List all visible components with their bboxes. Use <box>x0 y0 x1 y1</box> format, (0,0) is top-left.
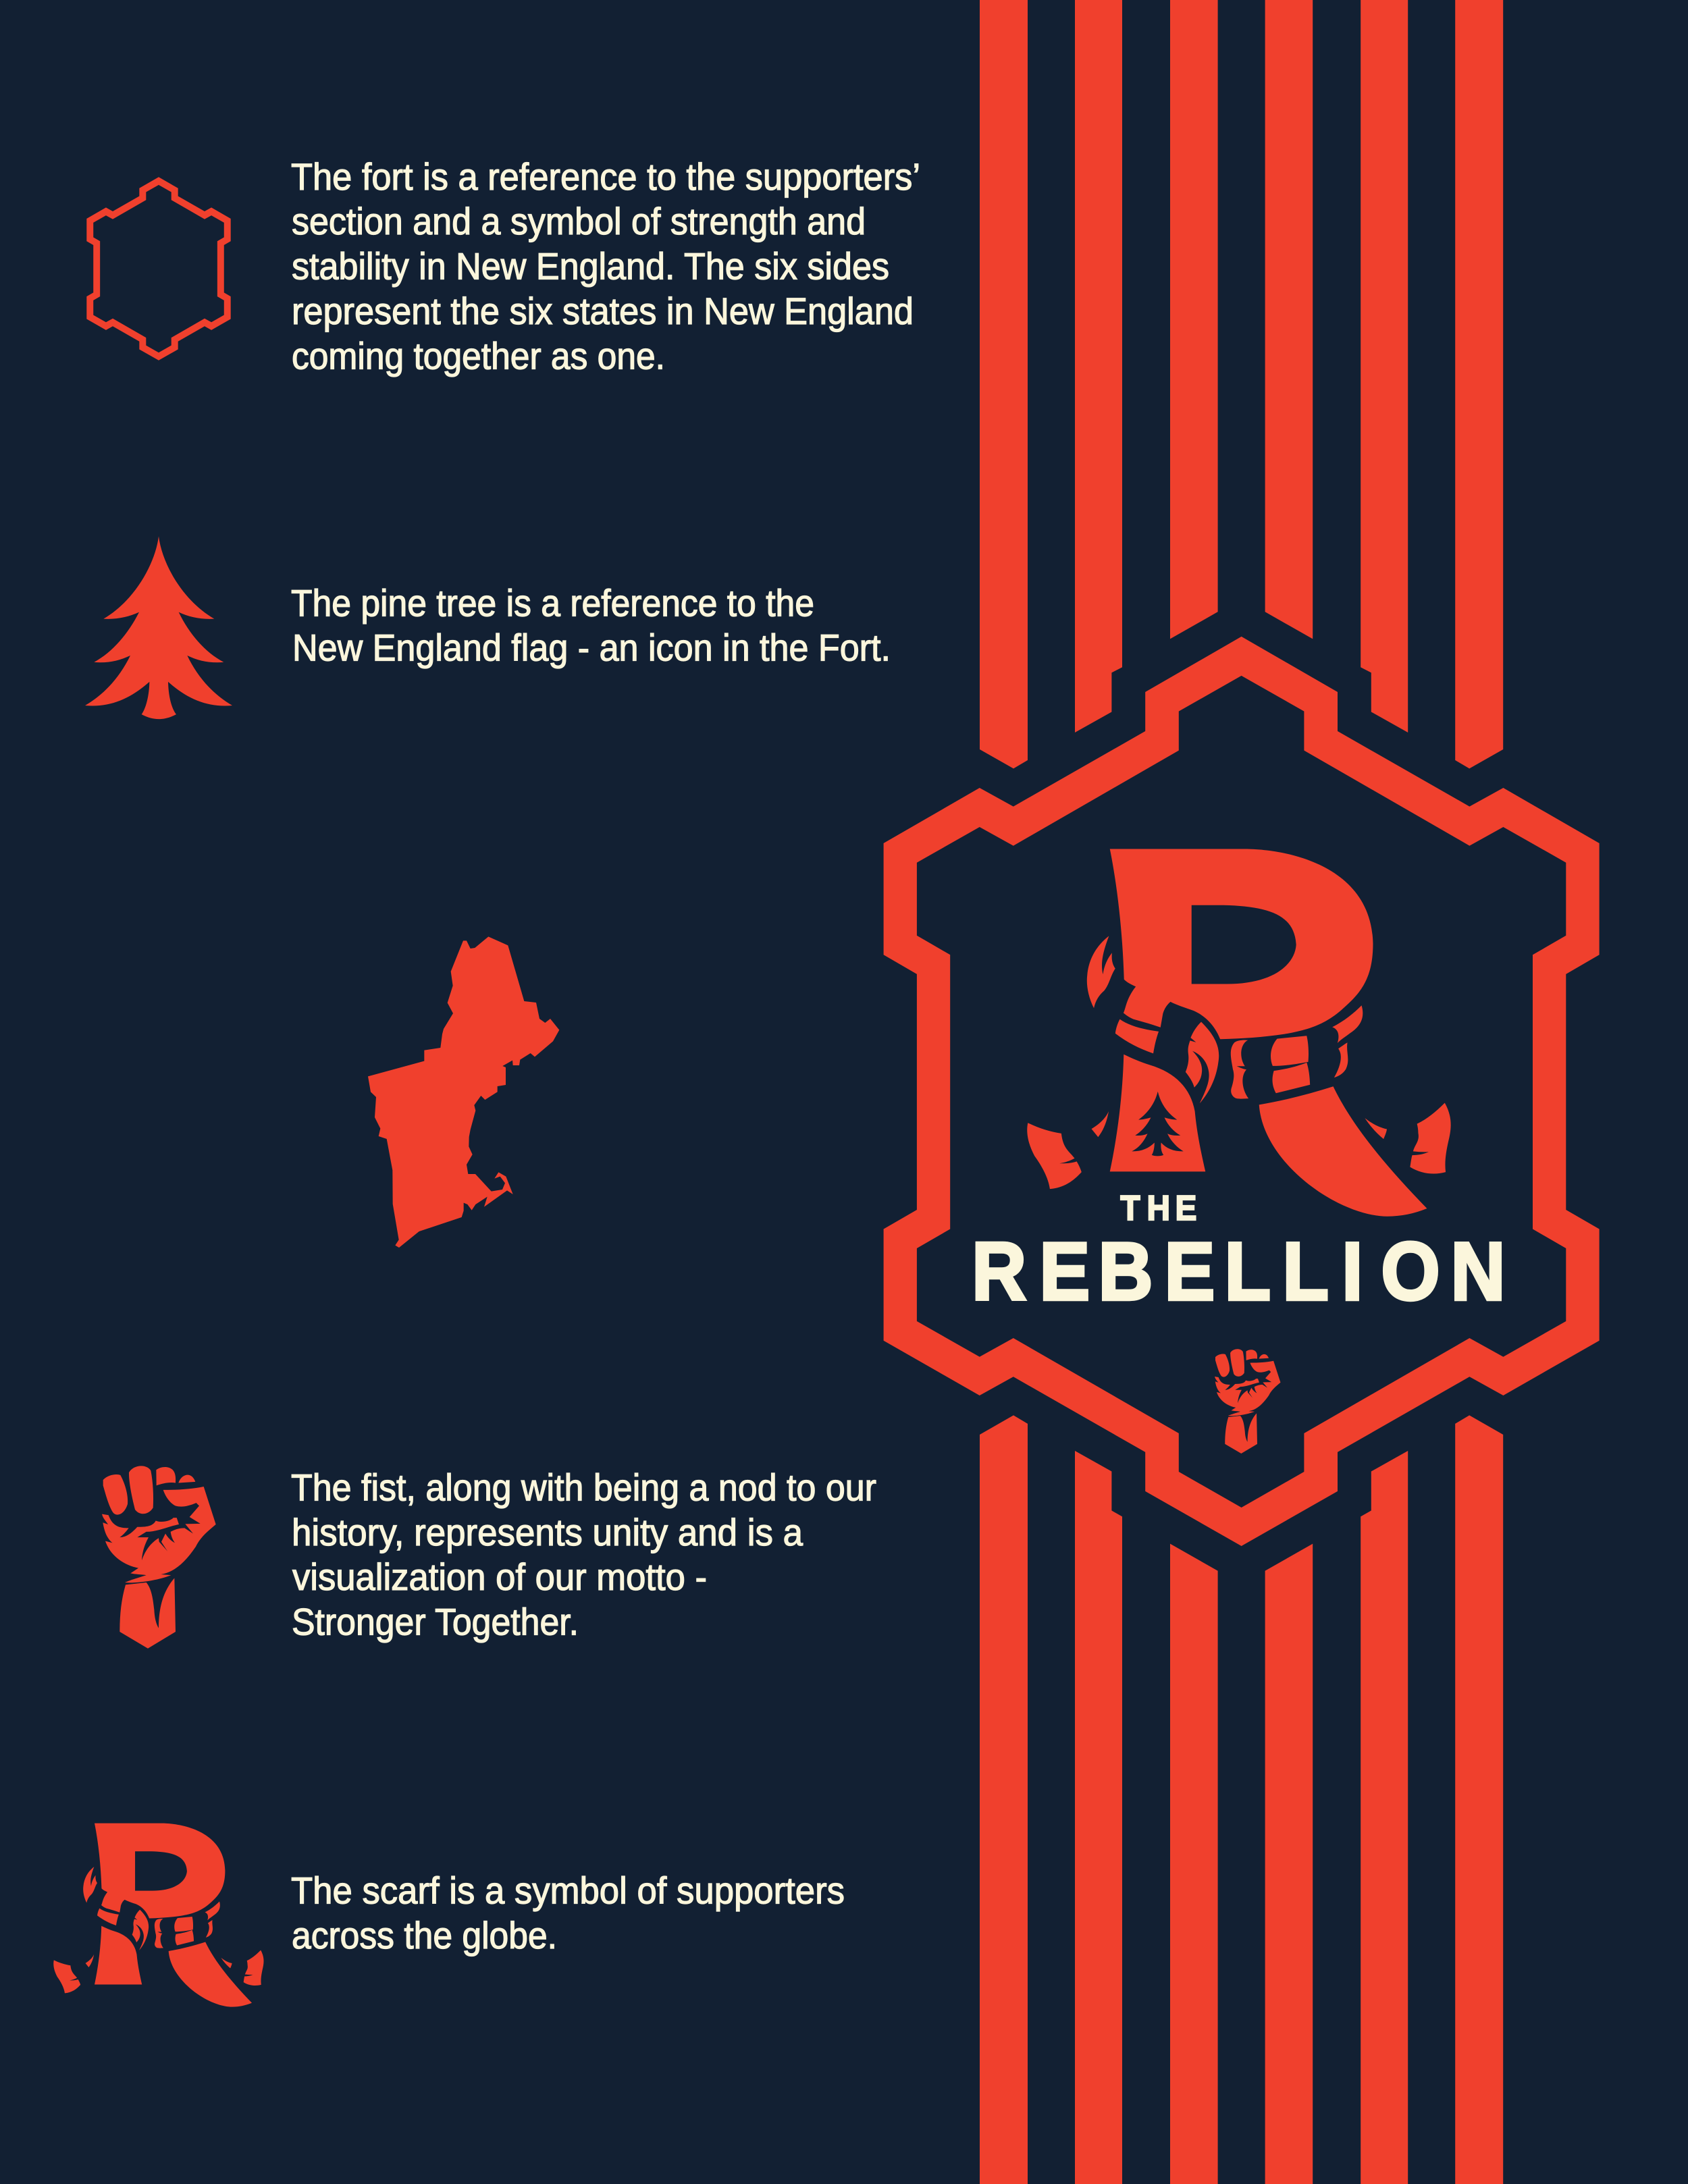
icon: fort <box>86 177 231 361</box>
text block: fist: The fist, along with being a nod to our <box>291 1466 876 1508</box>
icon: fist <box>102 1466 216 1649</box>
text block: fort: The fort is a reference to the supporters’ <box>291 155 920 198</box>
text block: fort: section and a symbol of strength and <box>292 200 866 242</box>
icon: scarf R <box>53 1823 264 2007</box>
wordmark: THE: THE <box>1120 1188 1196 1227</box>
text block: scarf <box>291 1869 845 1956</box>
text block: fist: Stronger Together. <box>292 1601 579 1643</box>
text block: fort: represent the six states in New England <box>292 290 914 332</box>
text block: fist: history, represents unity and is a <box>292 1511 803 1553</box>
text block: fort: stability in New England. The six sides <box>292 244 889 287</box>
text block: pine tree: New England flag - an icon in the Fort. <box>292 626 891 668</box>
text block: fort <box>291 155 920 377</box>
icon: pine tree <box>85 536 232 719</box>
text block: pine tree <box>291 581 891 668</box>
scarf-wrapped R emblem <box>1027 849 1451 1217</box>
small fist emblem <box>1215 1349 1281 1454</box>
text block: fist: visualization of our motto - <box>292 1555 707 1598</box>
text block: pine tree: The pine tree is a reference to the <box>291 581 814 624</box>
icon: New England map <box>368 936 559 1248</box>
text block: scarf: The scarf is a symbol of supporters <box>291 1869 845 1911</box>
top stripes <box>980 0 1503 768</box>
text block: scarf: across the globe. <box>292 1914 557 1956</box>
text block: fist <box>291 1466 876 1643</box>
wordmark: REBELLION: REBELLION <box>972 1225 1506 1317</box>
bottom stripes <box>980 1415 1503 2184</box>
text block: fort: coming together as one. <box>292 335 665 377</box>
fort outline <box>884 637 1600 1546</box>
main logo badge <box>884 637 1600 1546</box>
